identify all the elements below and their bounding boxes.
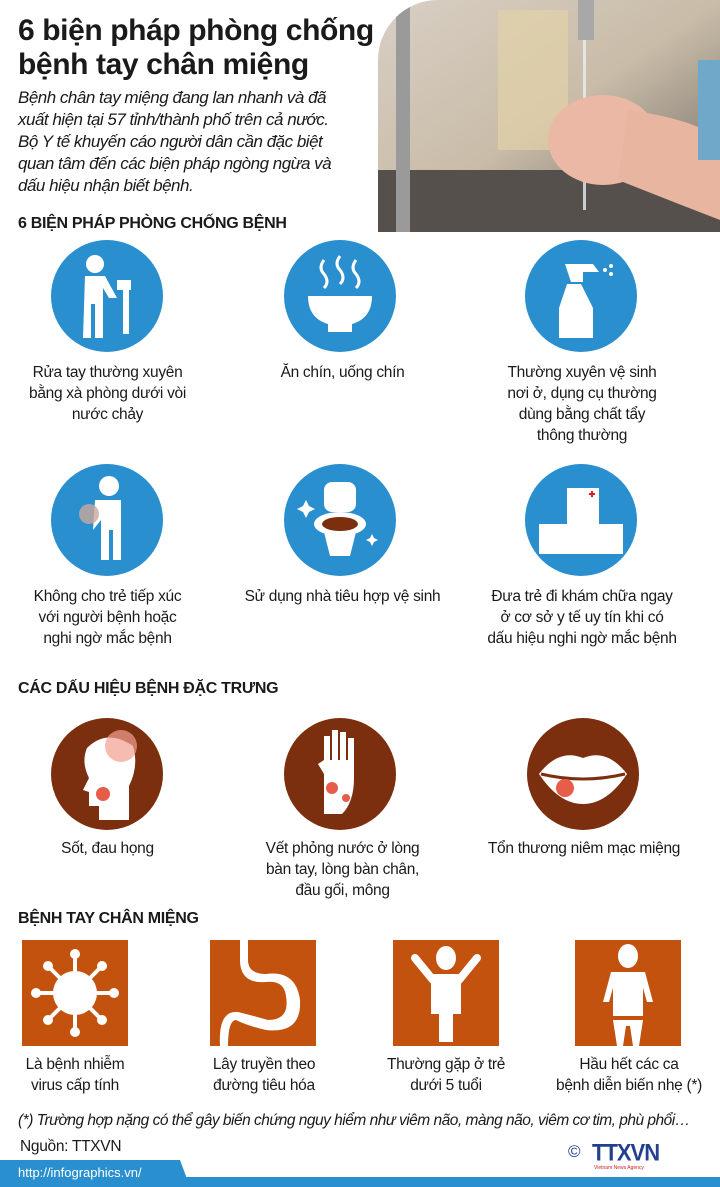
- label: virus cấp tính: [31, 1077, 119, 1094]
- heading: 6 measures: 6 BIỆN PHÁP PHÒNG CHỐNG BỆNH: [18, 215, 287, 232]
- intro text: xuất hiện tại 57 tỉnh/thành phố trên cả nước.: [18, 110, 328, 129]
- heading: symptoms: CÁC DẤU HIỆU BỆNH ĐẶC TRƯNG: [18, 680, 278, 697]
- label: Ăn chín, uống chín: [281, 364, 404, 381]
- label: [387, 1056, 505, 1094]
- intro text: Bộ Y tế khuyến cáo người dân cần đặc biệt: [18, 132, 322, 151]
- title: [18, 14, 374, 81]
- logo: TTXVN: Vietnam News Agency: [594, 1165, 644, 1171]
- icon: hospital: [525, 464, 637, 576]
- label: ở cơ sở y tế uy tín khi có: [500, 609, 664, 626]
- fact 2: digestive: [210, 940, 316, 1094]
- label: Là bệnh nhiễm: [26, 1056, 124, 1073]
- label: [266, 840, 419, 899]
- label: Rửa tay thường xuyên: [33, 364, 182, 381]
- measure 6: hospital: [487, 464, 677, 647]
- measure 4: avoid contact: [34, 464, 182, 647]
- heading: disease: BỆNH TAY CHÂN MIỆNG: [18, 910, 199, 927]
- footer bar with url: http://infographics.vn/: [18, 1165, 142, 1180]
- label: Đưa trẻ đi khám chữa ngay: [491, 588, 673, 605]
- label: Sốt, đau họng: [61, 840, 154, 857]
- logo: TTXVN: [568, 1139, 659, 1171]
- label: Lây truyền theo: [213, 1056, 315, 1073]
- label: thông thường: [537, 427, 627, 444]
- label: Sử dụng nhà tiêu hợp vệ sinh: [245, 588, 440, 605]
- label: Hầu hết các ca: [579, 1056, 679, 1073]
- source: Nguồn: TTXVN: [20, 1138, 121, 1155]
- logo: TTXVN: TTXVN: [592, 1139, 659, 1166]
- label: đầu gối, mông: [295, 882, 390, 899]
- measure 5: toilet: [245, 464, 440, 605]
- label: với người bệnh hoặc: [39, 609, 176, 626]
- title: 6 biện pháp phòng chống: [18, 14, 374, 47]
- icon: virus: [22, 940, 128, 1046]
- label: [34, 588, 182, 647]
- symptom 1: fever sore throat: [51, 718, 163, 857]
- label: Vết phỏng nước ở lòng: [266, 840, 419, 857]
- symptom 2: blisters: [266, 718, 419, 899]
- label: [213, 1056, 316, 1094]
- measure 1: hand washing: [29, 240, 186, 423]
- intro text: dấu hiệu nhận biết bệnh.: [18, 176, 193, 195]
- label: [556, 1056, 702, 1094]
- label: dưới 5 tuổi: [410, 1077, 482, 1094]
- label: Thường xuyên vệ sinh: [508, 364, 656, 381]
- label: Không cho trẻ tiếp xúc: [34, 588, 181, 605]
- footnote: (*) Trường hợp nặng có thể gây biến chứng nguy hiểm như viêm não, màng não, viêm cơ tim, phù phổi…: [18, 1112, 690, 1129]
- fact 3: child under 5: [387, 940, 505, 1094]
- icon: hand: [284, 718, 396, 830]
- intro text: Bệnh chân tay miệng đang lan nhanh và đã: [18, 88, 326, 107]
- intro text: [17, 88, 331, 195]
- icon: lips: [527, 718, 639, 830]
- label: nghi ngờ mắc bệnh: [43, 630, 172, 647]
- label: [487, 588, 677, 647]
- icon: bowl: [284, 240, 396, 352]
- symptom 3: mouth: [488, 718, 680, 857]
- label: [26, 1055, 124, 1094]
- icon: child arms up: [393, 940, 499, 1046]
- label: Tổn thương niêm mạc miệng: [488, 840, 680, 857]
- label: bệnh diễn biến nhẹ (*): [556, 1077, 702, 1094]
- label: bàn tay, lòng bàn chân,: [266, 861, 419, 878]
- label: đường tiêu hóa: [213, 1077, 315, 1094]
- icon: head: [51, 718, 163, 830]
- title: bệnh tay chân miệng: [18, 48, 309, 81]
- label: Thường gặp ở trẻ: [387, 1056, 505, 1073]
- label: nước chảy: [72, 406, 143, 423]
- icon: toddler: [575, 940, 681, 1046]
- icon: spray bottle: [525, 240, 637, 352]
- icon: stomach: [210, 940, 316, 1046]
- label: [507, 364, 657, 444]
- measure 2: cooked food: [280, 240, 404, 381]
- icon: toilet: [284, 464, 396, 576]
- measure 3: cleaning: [507, 240, 657, 444]
- icon: washing person: [51, 240, 163, 352]
- footer bar with url: [0, 1160, 720, 1187]
- label: dấu hiệu nghi ngờ mắc bệnh: [487, 630, 677, 647]
- label: nơi ở, dụng cụ thường: [507, 385, 657, 402]
- logo: TTXVN: ©: [568, 1142, 581, 1161]
- intro text: quan tâm đến các biện pháp ngòng ngừa và: [18, 154, 331, 173]
- icon: person coughing: [51, 464, 163, 576]
- photo: child washing hands: [378, 0, 720, 232]
- fact 4: mild cases: [556, 940, 702, 1094]
- label: [29, 364, 186, 423]
- fact 1: virus: [22, 940, 128, 1094]
- label: bằng xà phòng dưới vòi: [29, 385, 186, 402]
- label: dùng bằng chất tẩy: [519, 406, 645, 423]
